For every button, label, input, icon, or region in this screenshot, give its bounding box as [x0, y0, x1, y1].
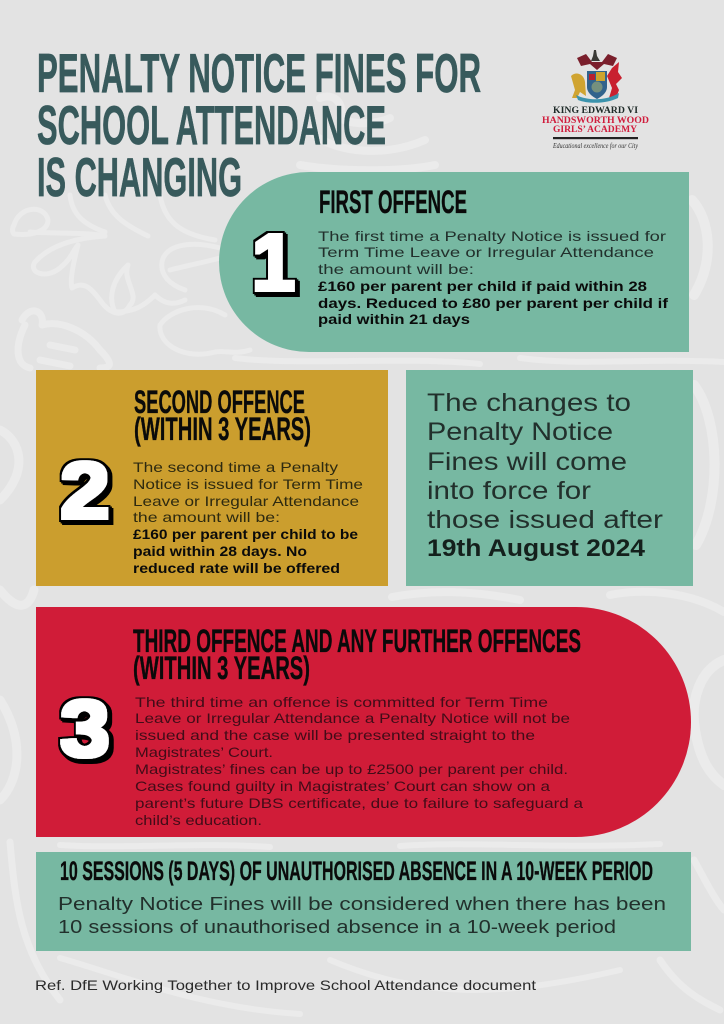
logo: school crest and name: GIRLS’ ACADEMY: [553, 125, 637, 135]
body text: [58, 893, 666, 937]
body text: child’s education.: [135, 812, 262, 828]
body text: reduced rate will be offered: [133, 560, 340, 576]
number 3: 3: [60, 684, 110, 773]
footer reference: Ref. DfE Working Together to Improve School Attendance document: [35, 977, 536, 993]
body text: The second time a Penalty: [133, 459, 338, 475]
body text: Penalty Notice Fines will be considered when there has been: [58, 893, 666, 914]
body text: [133, 459, 363, 576]
body text: Notice is issued for Term Time: [133, 476, 363, 492]
icon: crest: [571, 50, 622, 103]
panel: 10 sessions: [36, 852, 691, 951]
heading: SECOND OFFENCE: [134, 384, 305, 420]
body text: Magistrates’ fines can be up to £2500 per parent per child.: [135, 761, 568, 777]
number 1: 1: [252, 218, 295, 307]
title: IS CHANGING: [37, 147, 242, 208]
body text: Cases found guilty in Magistrates’ Court can show on a: [135, 778, 550, 794]
panel: changes date: into force for: [427, 477, 591, 505]
heading: FIRST OFFENCE: [319, 184, 467, 220]
body text: the amount will be:: [318, 261, 474, 277]
body text: [135, 694, 583, 828]
panel: second offence: [36, 370, 388, 586]
heading: (WITHIN 3 YEARS): [134, 411, 311, 447]
heading: [134, 384, 311, 447]
body text: The first time a Penalty Notice is issued for: [318, 228, 666, 244]
panel: changes date: Fines will come: [427, 448, 627, 476]
heading: [133, 623, 581, 686]
body text: Term Time Leave or Irregular Attendance: [318, 244, 654, 260]
title: SCHOOL ATTENDANCE: [37, 95, 386, 156]
heading: (WITHIN 3 YEARS): [133, 650, 310, 686]
body text: 10 sessions of unauthorised absence in a 10-week period: [58, 916, 616, 937]
body text: the amount will be:: [133, 509, 280, 525]
number 2: 2: [60, 446, 110, 535]
panel: changes date: Penalty Notice: [427, 418, 613, 446]
body text: Leave or Irregular Attendance: [133, 493, 359, 509]
body text: days. Reduced to £80 per parent per child if: [318, 295, 668, 311]
panel: changes date: [406, 370, 693, 586]
body text: The third time an offence is committed for Term Time: [135, 694, 548, 710]
panel: changes date: The changes to: [427, 389, 631, 417]
logo: school crest and name: [542, 50, 649, 150]
body text: £160 per parent per child if paid within 28: [318, 278, 647, 294]
body text: Magistrates’ Court.: [135, 744, 273, 760]
body text: Leave or Irregular Attendance a Penalty Notice will not be: [135, 710, 570, 726]
body text: paid within 21 days: [318, 311, 470, 327]
panel: changes date: those issued after: [427, 506, 663, 534]
panel: third offence: [36, 607, 691, 837]
body text: £160 per parent per child to be: [133, 526, 358, 542]
panel: first offence: [219, 172, 689, 352]
body text: parent’s future DBS certificate, due to failure to safeguard a: [135, 795, 583, 811]
logo: school crest and name: Educational excellence for our City: [552, 141, 639, 150]
panel: changes date: 19th August 2024: [427, 535, 646, 562]
logo: school crest and name: KING EDWARD VI: [553, 106, 638, 116]
body text: paid within 28 days. No: [133, 543, 307, 559]
body text: issued and the case will be presented straight to the: [135, 727, 535, 743]
title: [37, 43, 481, 208]
logo: school crest and name: HANDSWORTH WOOD: [542, 116, 649, 126]
body text: [318, 228, 668, 327]
